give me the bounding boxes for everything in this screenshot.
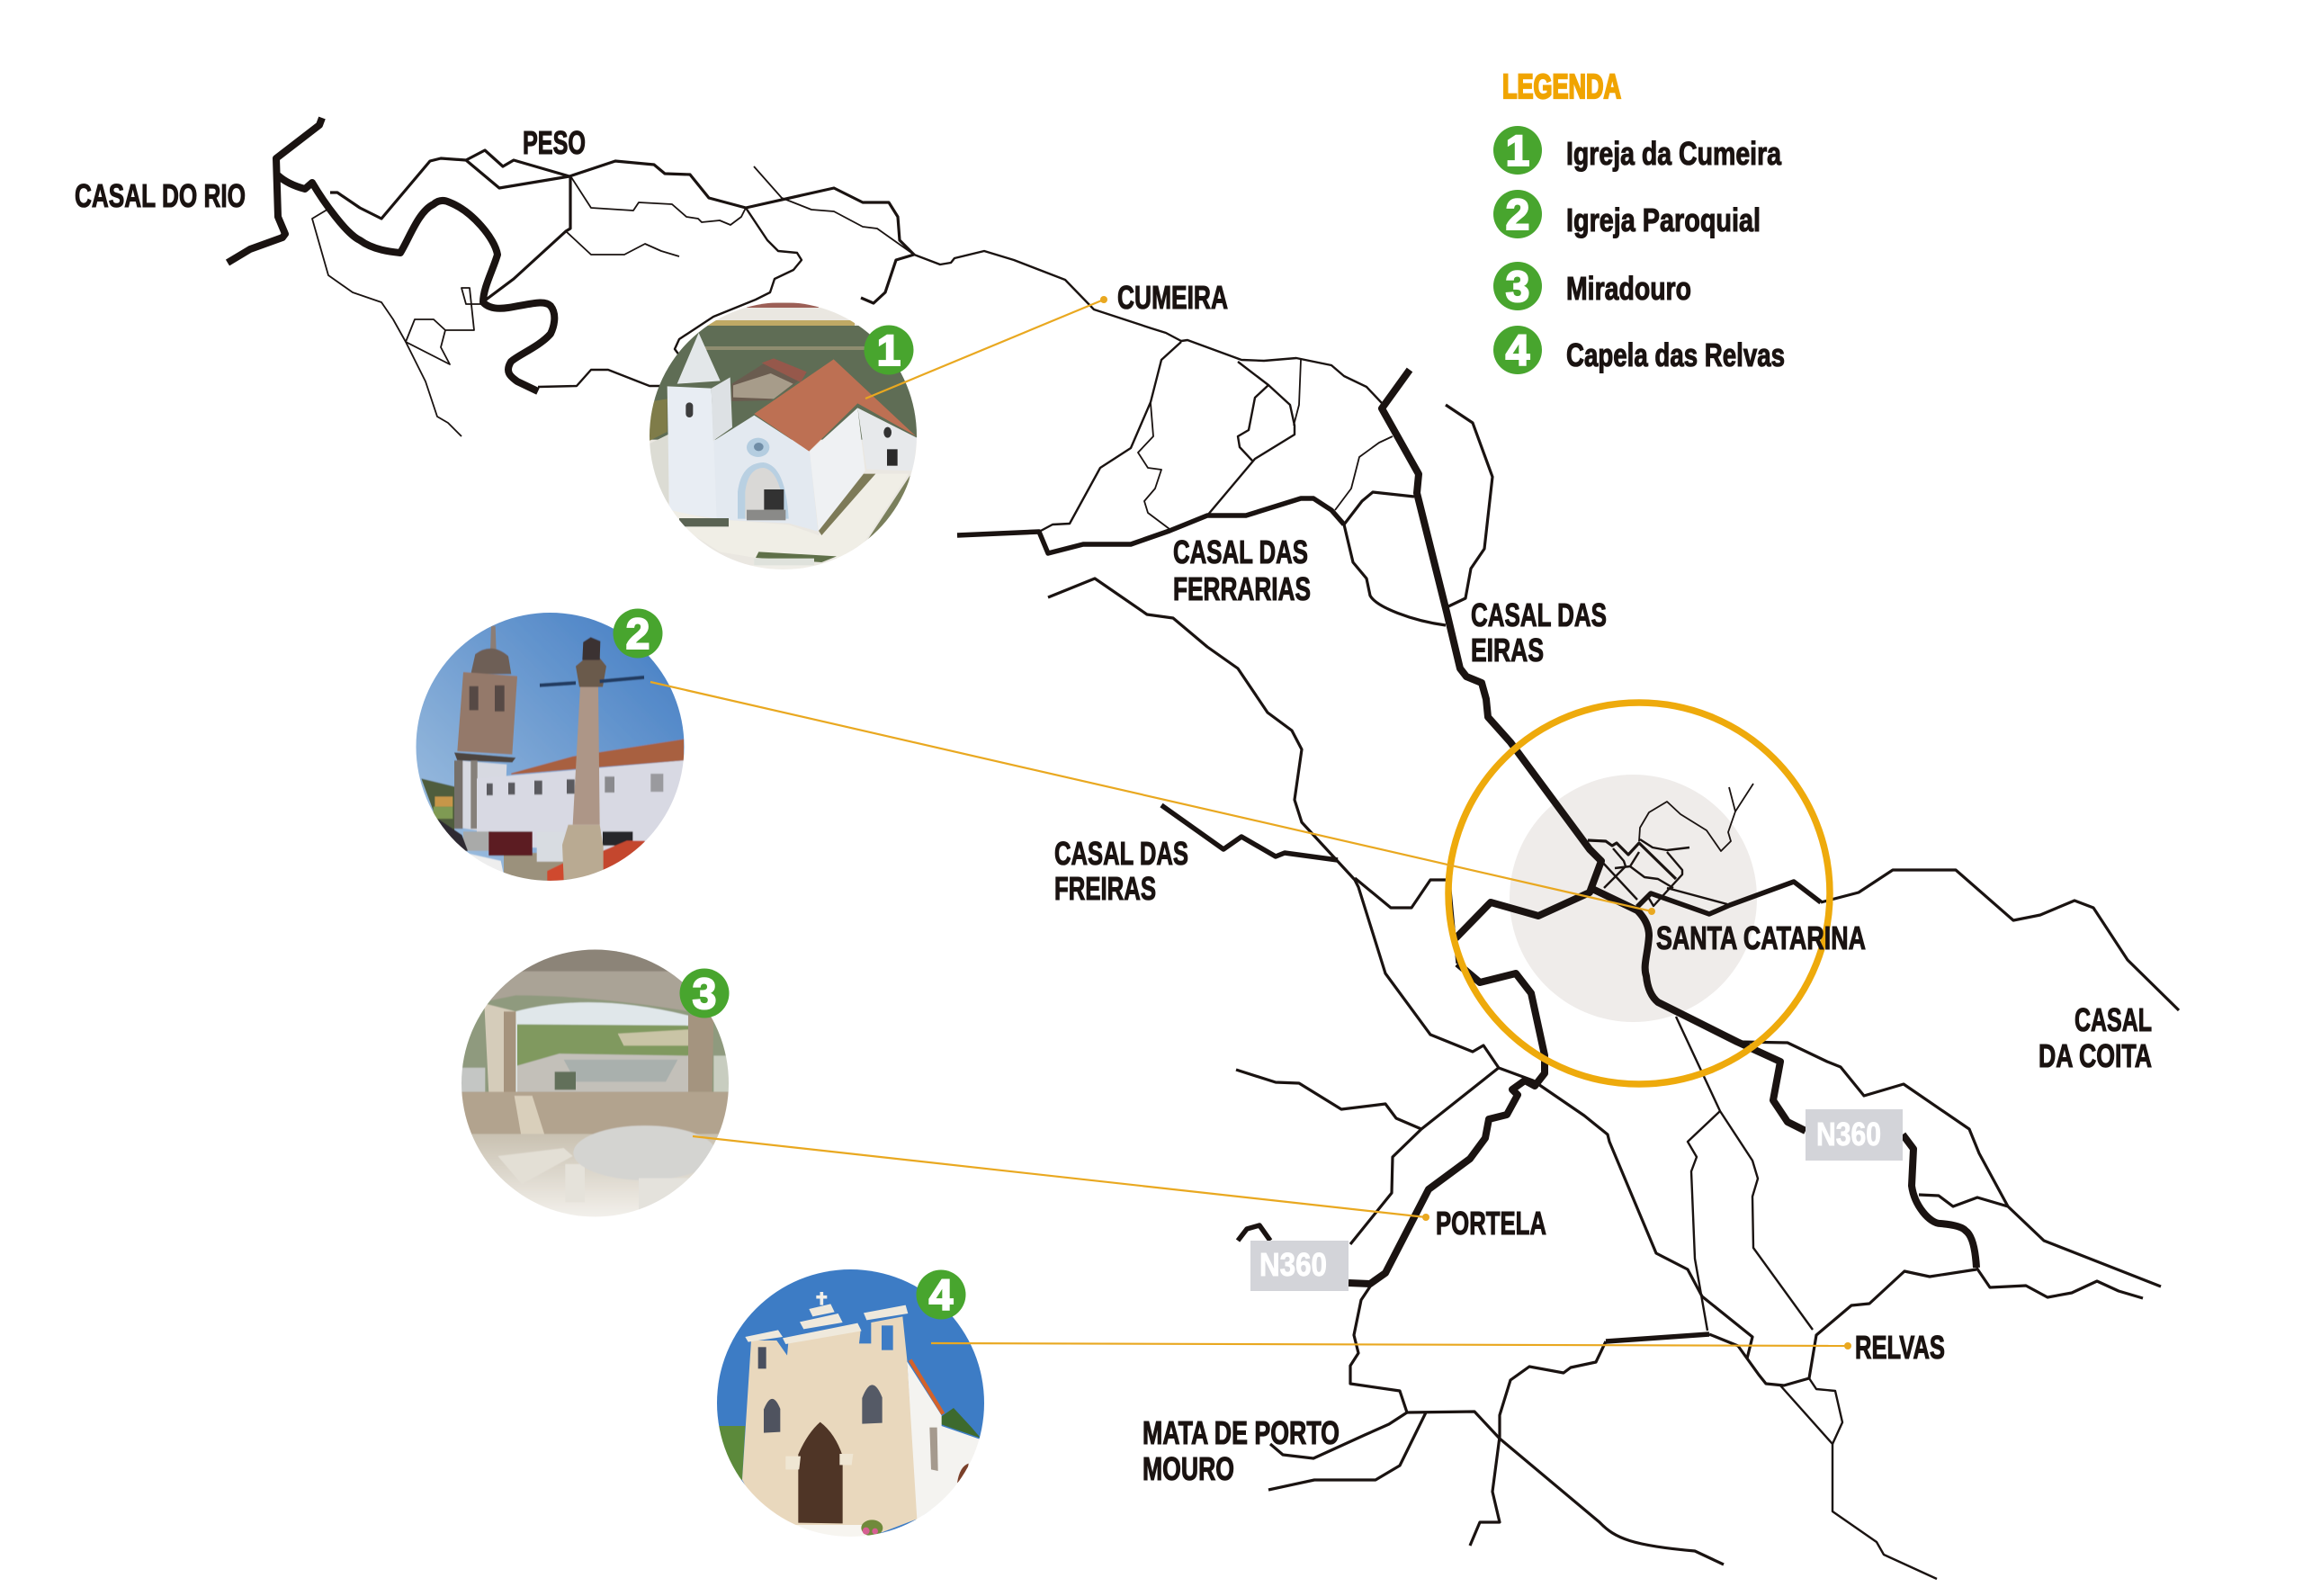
legend item 2 [1493, 190, 1761, 239]
road label box N360 east: N360 [1816, 1116, 1881, 1152]
badge 3: 3 [693, 971, 716, 1018]
legend item 4: Capela das Relvas [1566, 336, 1785, 373]
road label box N360 west: N360 [1259, 1246, 1327, 1283]
label: Mata de Porto Mouro: MATA DE PORTO [1143, 1414, 1340, 1451]
badge 2 [614, 608, 662, 659]
label: Casal das Freiras [1054, 835, 1188, 907]
photo 1: Igreja da Cumeira [645, 297, 924, 578]
photo 3: Miradouro [456, 943, 735, 1224]
legend title: LEGENDA [1502, 68, 1621, 106]
badge 1 [864, 326, 914, 375]
label: Portela: PORTELA [1436, 1205, 1546, 1242]
label: Casal da Coita [2039, 1001, 2152, 1074]
label: Casal das Ferrarias: CASAL DAS [1173, 533, 1308, 570]
place labels [75, 124, 2152, 1487]
leader line: photo 2 to Santa Catarina [650, 682, 1655, 915]
label: Casal do Rio: CASAL DO RIO [75, 177, 246, 214]
label: Casal das Eiras: CASAL DAS [1471, 596, 1607, 633]
label: Casal das Eiras: EIRAS [1471, 632, 1544, 668]
photo 2: Igreja Paroquial [411, 605, 690, 887]
leader line: photo 1 to Cumeira [865, 296, 1107, 399]
road label box N360 west [1250, 1241, 1349, 1291]
label: Peso: PESO [523, 124, 586, 161]
legend item 3: Miradouro [1566, 270, 1691, 307]
highlighted area: orange ring [1448, 703, 1830, 1084]
label: Casal da Coita: CASAL [2074, 1001, 2152, 1038]
label: Casal da Coita: DA COITA [2039, 1037, 2152, 1074]
label: Mata de Porto Mouro: MOURO [1143, 1450, 1234, 1487]
label: Mata de Porto Mouro [1143, 1414, 1340, 1487]
label: Casal das Eiras [1471, 596, 1607, 668]
leader line: photo 3 to Portela [693, 1136, 1429, 1221]
label: Casal das Freiras: FREIRAS [1054, 870, 1156, 907]
label: Cumeira: CUMEIRA [1117, 279, 1228, 316]
road label box N360 east [1806, 1109, 1903, 1161]
legend item 1: Igreja da Cumeira [1566, 135, 1782, 172]
legend item 2: Igreja Paroquial [1566, 202, 1761, 238]
label: Santa Catarina: SANTA CATARINA [1656, 919, 1866, 956]
badge 2: 2 [626, 611, 650, 659]
legend item 3 [1493, 262, 1691, 311]
legend item 1 [1493, 126, 1782, 175]
label: Casal das Freiras: CASAL DAS [1054, 835, 1188, 872]
label: Relvas: RELVAS [1855, 1329, 1945, 1366]
badge 4: 4 [929, 1272, 954, 1320]
label: Casal das Ferrarias: FERRARIAS [1173, 570, 1311, 607]
legend item 4 [1493, 326, 1785, 375]
badge 3 [680, 968, 729, 1018]
badge 4 [916, 1270, 966, 1320]
legend item 4: 4 [1506, 327, 1530, 375]
road network [228, 118, 2179, 1579]
photo 4: Capela das Relvas [711, 1266, 990, 1546]
highlighted area: inner grey circle [1510, 775, 1757, 1022]
legend item 2: 2 [1506, 192, 1529, 239]
legend item 1: 1 [1506, 128, 1529, 175]
leader line: photo 4 to Relvas [931, 1342, 1851, 1349]
legend item 3: 3 [1506, 264, 1529, 311]
legend [1493, 68, 1785, 375]
badge 1: 1 [877, 327, 901, 375]
label: Casal das Ferrarias [1173, 533, 1311, 607]
